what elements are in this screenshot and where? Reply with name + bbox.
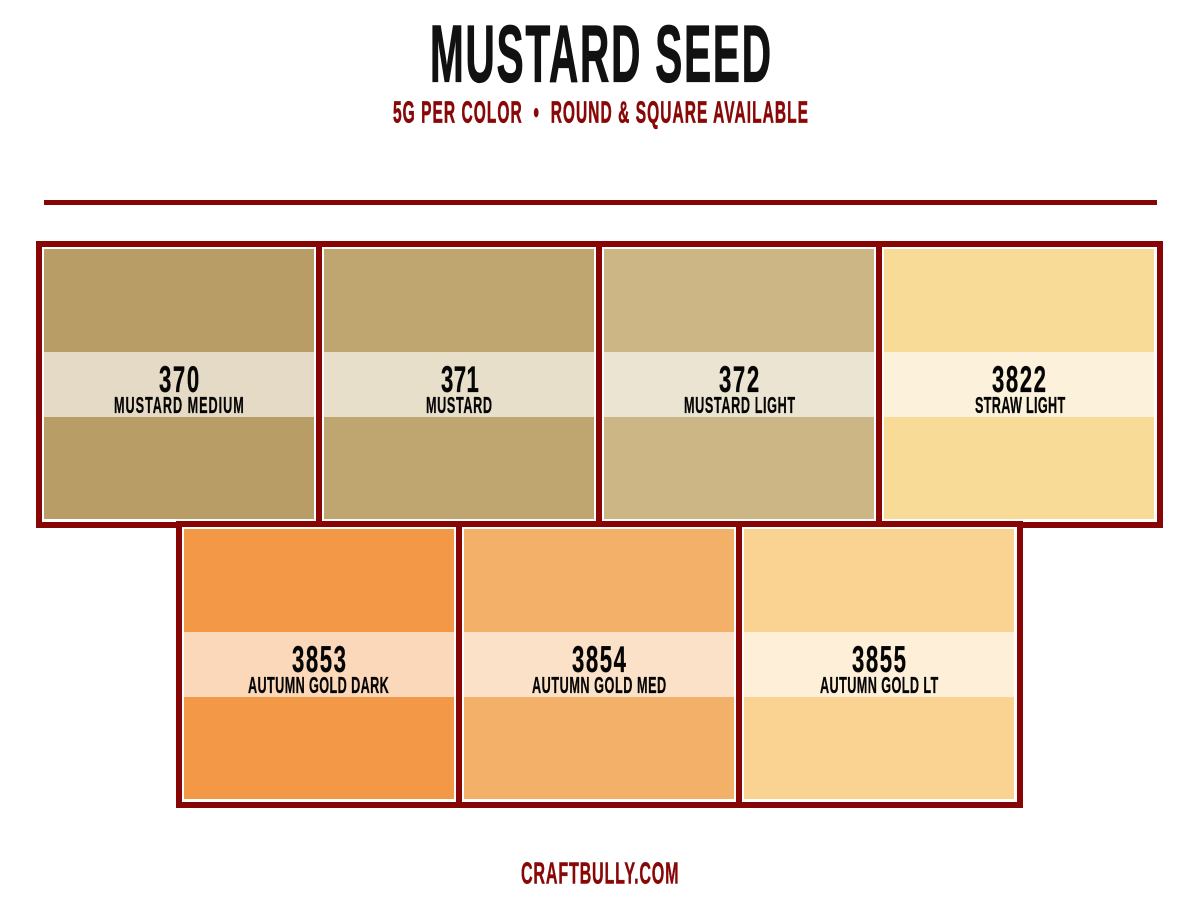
frame dividers: top row [316, 241, 882, 522]
swatch 370 [44, 249, 314, 519]
swatch 372: MUSTARD LIGHT [684, 392, 796, 418]
divider rule [44, 200, 1157, 205]
swatch 372 [604, 249, 874, 519]
swatch 3855: AUTUMN GOLD LT [820, 672, 939, 698]
swatch 3853: AUTUMN GOLD DARK [248, 672, 389, 698]
swatch 3822: STRAW LIGHT [975, 392, 1066, 418]
swatch 3855: 3855 [852, 639, 906, 680]
swatch 3853: 3853 [292, 639, 346, 680]
swatch 372: 372 [719, 359, 759, 400]
subtitle: 5G PER COLOR • ROUND & SQUARE AVAILABLE [393, 96, 808, 130]
title: MUSTARD SEED [430, 8, 771, 99]
frame dividers: bottom row [456, 521, 742, 808]
swatch 3854 [464, 529, 734, 799]
swatch 371 [324, 249, 594, 519]
swatch 3855 [744, 529, 1014, 799]
panel: top row frame [39, 244, 1160, 525]
panel: bottom row frame [179, 524, 1020, 805]
swatch 3853 [184, 529, 454, 799]
swatch 3854: AUTUMN GOLD MED [532, 672, 666, 698]
swatch 370: 370 [159, 359, 199, 400]
swatch 3854: 3854 [572, 639, 626, 680]
swatch 370: MUSTARD MEDIUM [114, 392, 244, 418]
swatch 371: 371 [441, 359, 479, 400]
footer: website: CRAFTBULLY.COM [521, 857, 679, 891]
swatch 371: MUSTARD [426, 392, 492, 418]
swatch 3822 [884, 249, 1154, 519]
swatch 3822: 3822 [992, 359, 1046, 400]
